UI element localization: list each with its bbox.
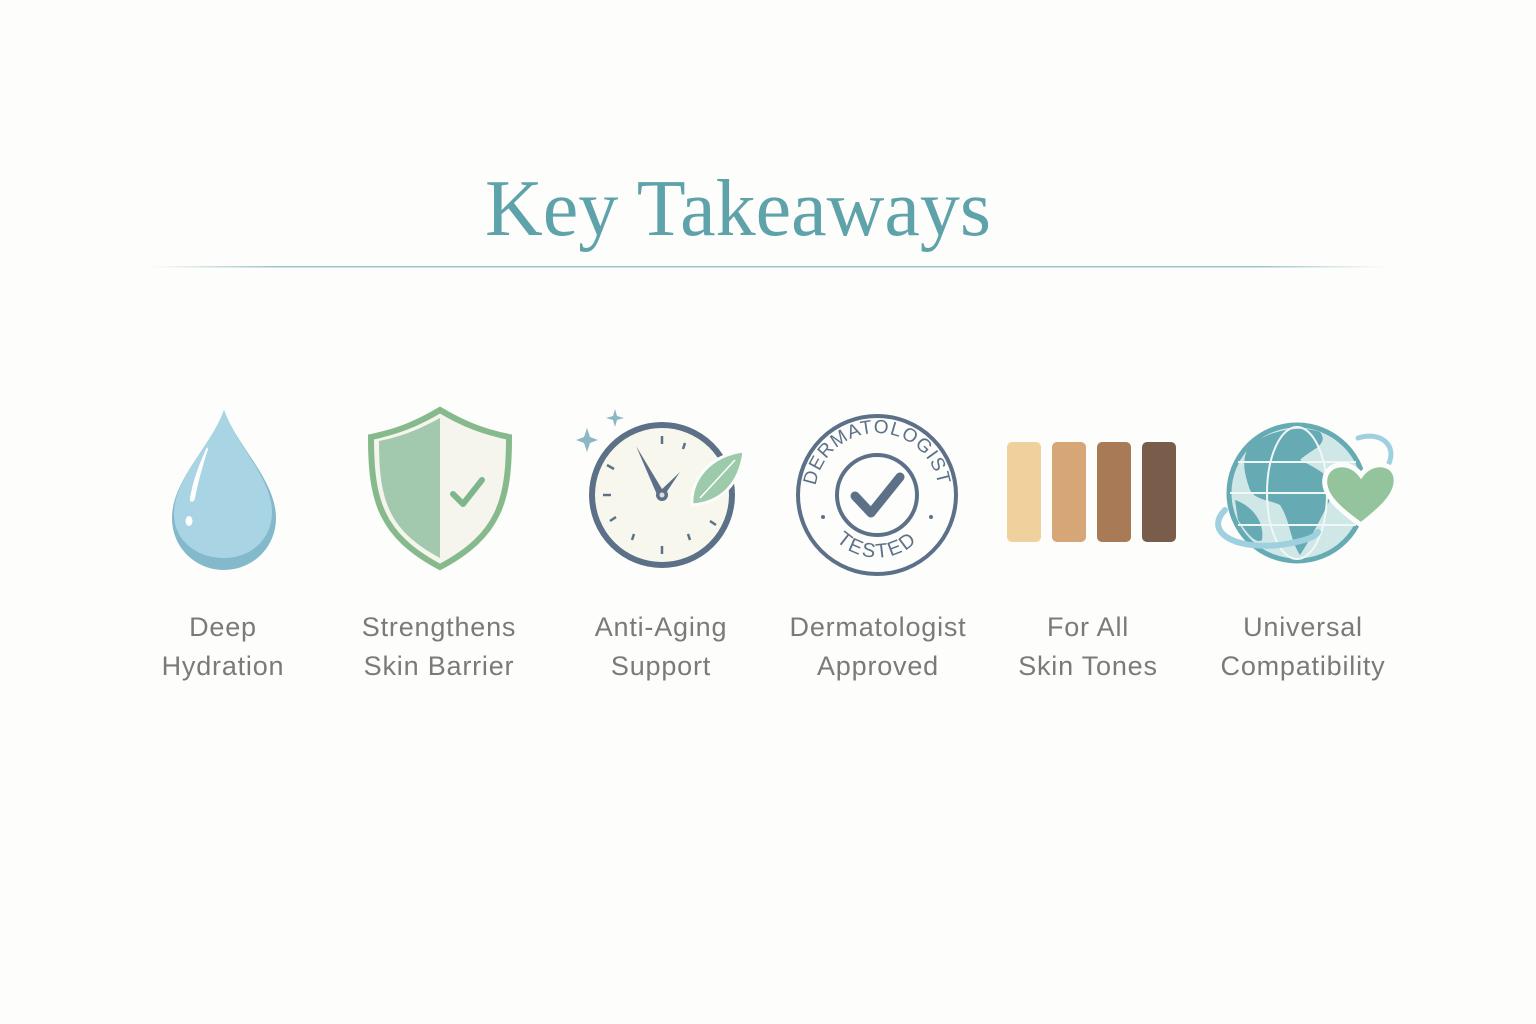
icon: dermatologist stamp: DERMATOLOGIST: [803, 420, 951, 484]
labels: Skin Tones: [1018, 651, 1158, 681]
labels: Deep: [189, 612, 257, 642]
labels: Compatibility: [1221, 651, 1385, 681]
labels: Dermatologist: [790, 612, 966, 642]
icon: dermatologist stamp: [796, 414, 958, 576]
icon: globe with heart: [1218, 425, 1396, 561]
labels: Approved: [817, 651, 939, 681]
labels: Support: [611, 651, 711, 681]
icon: dermatologist stamp: TESTED: [840, 530, 914, 558]
icon: water drop: [172, 410, 276, 570]
labels: [162, 612, 1385, 681]
icon: clock: [576, 409, 744, 565]
labels: Universal: [1243, 612, 1363, 642]
labels: Anti-Aging: [595, 612, 727, 642]
labels: Hydration: [162, 651, 284, 681]
labels: Skin Barrier: [364, 651, 514, 681]
labels: Strengthens: [362, 612, 516, 642]
title: Key Takeaways: [485, 165, 991, 253]
icon: shield: [371, 410, 509, 567]
labels: For All: [1047, 612, 1129, 642]
icon: skin tone swatches: [1007, 442, 1176, 542]
